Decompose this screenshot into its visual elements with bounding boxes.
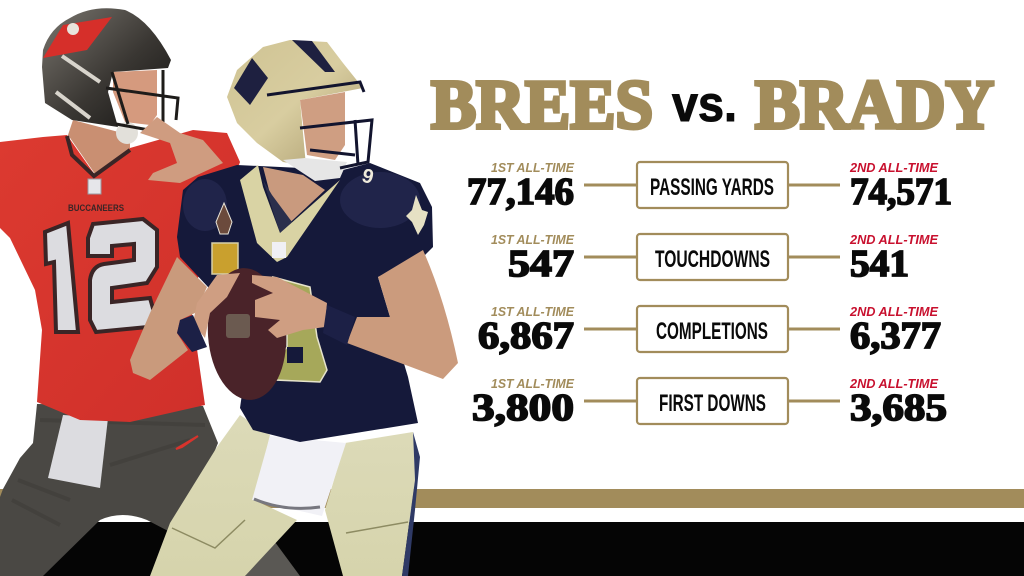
row: first downs xyxy=(472,377,947,429)
connector xyxy=(788,256,840,258)
vs.: vs. xyxy=(672,76,737,132)
hands xyxy=(193,273,240,338)
pants stripe xyxy=(402,432,420,576)
Brees rank: 1ST ALL-TIME xyxy=(491,305,575,319)
undershirt xyxy=(263,180,292,233)
BRADY: BRADY xyxy=(755,67,994,144)
jersey xyxy=(0,130,240,422)
category: PASSING YARDS xyxy=(650,174,774,201)
category box xyxy=(637,378,788,424)
Brees value: 547 xyxy=(508,243,574,285)
shoulder pad shading xyxy=(340,172,420,228)
BREES: BREES xyxy=(431,67,653,144)
Brees value: 77,146 xyxy=(467,171,574,213)
player: Brady in red Buccaneers jersey xyxy=(0,8,300,576)
Brees rank: 1ST ALL-TIME xyxy=(491,377,575,391)
right arm xyxy=(347,250,458,379)
helmet stripe xyxy=(292,40,335,72)
gold stripe xyxy=(0,489,1024,508)
category: TOUCHDOWNS xyxy=(655,246,770,273)
shoulder number: 9 xyxy=(359,165,376,189)
memorial patch xyxy=(216,203,232,234)
title: BREES vs. BRADY xyxy=(431,67,994,144)
jersey body xyxy=(177,163,433,442)
left arm xyxy=(130,257,207,380)
wristbands xyxy=(323,305,355,345)
connector xyxy=(584,256,637,258)
Brees rank: 1ST ALL-TIME xyxy=(491,161,575,175)
neck xyxy=(263,167,325,232)
ball logo xyxy=(226,314,250,338)
Brady rank: 2ND ALL-TIME xyxy=(849,233,939,247)
collar xyxy=(67,136,130,176)
chin cup xyxy=(116,122,138,144)
facemask xyxy=(267,82,372,168)
face xyxy=(113,70,157,125)
sleeve fleur-de-lis xyxy=(406,195,428,235)
connector xyxy=(584,328,637,330)
number counter xyxy=(287,347,303,363)
connector xyxy=(788,328,840,330)
category box xyxy=(637,306,788,352)
nfl shield xyxy=(88,179,101,194)
connector xyxy=(584,184,637,186)
nike swoosh xyxy=(176,436,198,449)
towel xyxy=(48,415,108,488)
helmet xyxy=(227,40,363,166)
Brady value: 74,571 xyxy=(850,171,952,213)
Brady value: 6,377 xyxy=(850,315,941,357)
pad seam xyxy=(172,520,408,548)
connector xyxy=(584,400,637,402)
football xyxy=(203,265,291,403)
connector xyxy=(788,400,840,402)
fleur-de-lis logo xyxy=(234,58,268,105)
player: Brees in navy Saints jersey xyxy=(130,40,458,576)
Brady rank: 2ND ALL-TIME xyxy=(849,305,939,319)
connector xyxy=(788,184,840,186)
right leg xyxy=(325,432,415,576)
nfl shield xyxy=(272,242,286,258)
towel stripe xyxy=(254,499,320,508)
row: passing yards xyxy=(467,161,952,213)
Brees value: 3,800 xyxy=(472,387,574,429)
captain patch xyxy=(212,243,238,274)
neck xyxy=(68,120,130,174)
row: completions xyxy=(478,305,941,357)
gold collar xyxy=(240,165,340,262)
Brees value: 6,867 xyxy=(478,315,574,357)
row: touchdowns xyxy=(491,233,939,285)
left leg xyxy=(150,415,297,576)
wordmark: BUCCANEERS xyxy=(68,203,124,213)
Brady rank: 2ND ALL-TIME xyxy=(849,161,939,175)
gold number 9 xyxy=(273,277,327,382)
category: FIRST DOWNS xyxy=(659,390,766,417)
facemask xyxy=(106,70,178,132)
towel xyxy=(252,436,346,516)
Brady rank: 2ND ALL-TIME xyxy=(849,377,939,391)
throwing hand xyxy=(140,117,223,183)
face xyxy=(300,92,345,160)
black footer band xyxy=(0,522,1024,576)
helmet skull xyxy=(67,23,79,35)
chin strap xyxy=(283,158,347,181)
category box xyxy=(637,234,788,280)
helmet xyxy=(42,8,171,127)
category box xyxy=(637,162,788,208)
Brady value: 3,685 xyxy=(850,387,947,429)
helmet flag logo xyxy=(43,17,112,58)
Brady value: 541 xyxy=(850,243,909,285)
number 12 xyxy=(45,219,158,332)
category: COMPLETIONS xyxy=(656,318,768,345)
pants xyxy=(0,404,218,576)
Brees rank: 1ST ALL-TIME xyxy=(491,233,575,247)
